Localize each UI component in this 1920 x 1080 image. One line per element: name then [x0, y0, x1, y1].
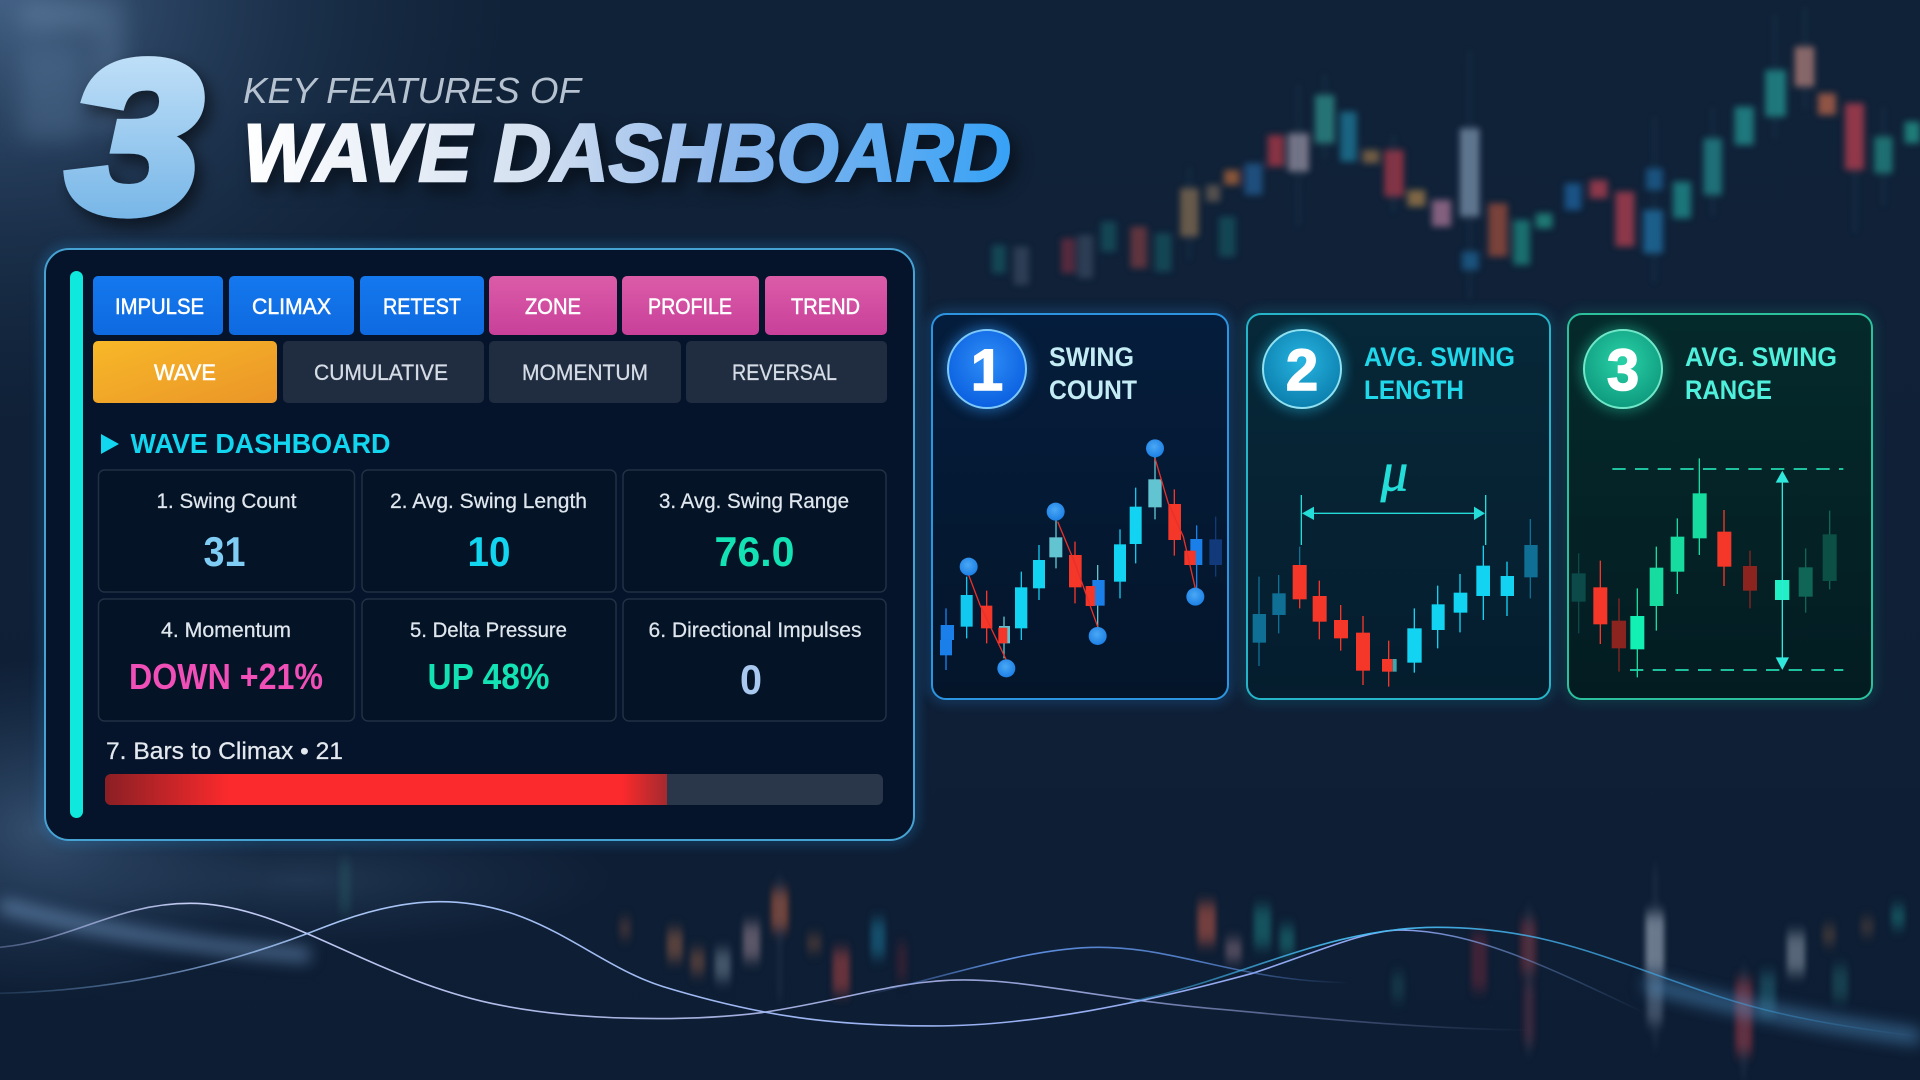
button: cumulative: CUMULATIVE [314, 360, 448, 385]
card 3: avg swing range [1568, 314, 1872, 699]
button: retest [360, 276, 484, 335]
panel: wave dashboard [45, 249, 914, 840]
card 3 heading: RANGE [1685, 375, 1772, 405]
card 3 heading [1685, 342, 1837, 405]
chart: swing range candles [1572, 458, 1843, 677]
button: impulse: IMPULSE [115, 294, 204, 319]
accent bar [70, 271, 83, 818]
background candlesticks: lower [339, 860, 1905, 1080]
card 2 heading: AVG. SWING [1364, 342, 1515, 372]
title: wave dashboard: WAVE DASHBOARD [243, 108, 1011, 199]
button: wave [93, 341, 277, 403]
metric: delta pressure: 5. Delta Pressure [410, 619, 567, 642]
button: zone: ZONE [525, 294, 581, 319]
metric: momentum: 4. Momentum [161, 619, 291, 642]
metric: delta pressure: UP 48% [428, 656, 550, 697]
metric: swing count: 31 [204, 528, 246, 575]
badge 3: 3 [1607, 338, 1639, 403]
button: impulse [93, 276, 223, 335]
card 2: avg swing length [1247, 314, 1550, 699]
card 1 heading [1049, 342, 1137, 405]
metric: avg swing length: 10 [468, 528, 510, 575]
card 2 heading [1364, 342, 1515, 405]
chart: swing candles [940, 439, 1222, 677]
metric: momentum [98, 599, 354, 721]
metric: avg swing length: 2. Avg. Swing Length [390, 490, 587, 513]
section heading: WAVE DASHBOARD [130, 428, 390, 459]
button row one [93, 276, 887, 335]
metric: directional impulses: 0 [740, 656, 762, 703]
button row two [93, 341, 887, 403]
button: reversal [686, 341, 887, 403]
metric: avg swing range: 3. Avg. Swing Range [659, 490, 849, 513]
chart: swing length candles: μ [1380, 442, 1408, 503]
button: momentum [489, 341, 681, 403]
button: climax: CLIMAX [252, 294, 331, 319]
button: reversal: REVERSAL [732, 360, 837, 385]
card 2 heading: LENGTH [1364, 375, 1464, 405]
metric: directional impulses: 6. Directional Impulses [648, 619, 862, 642]
button: retest: RETEST [383, 294, 461, 319]
metric: avg swing range [623, 470, 886, 592]
title: key features of: KEY FEATURES OF [243, 70, 583, 111]
badge 1 [944, 326, 1030, 412]
metric: directional impulses [623, 599, 886, 721]
metric: avg swing length [362, 470, 616, 592]
badge 2 [1259, 326, 1345, 412]
button: trend: TREND [791, 294, 860, 319]
button: wave: WAVE [154, 360, 216, 385]
button: cumulative [283, 341, 484, 403]
badge 1: 1 [971, 338, 1003, 403]
card 1: swing count [932, 314, 1228, 699]
metric: delta pressure [362, 599, 616, 721]
button: profile: PROFILE [648, 294, 732, 319]
bars to climax [105, 738, 883, 805]
bars to climax: 7. Bars to Climax • 21 [106, 738, 343, 765]
card 1 heading: COUNT [1049, 375, 1137, 405]
badge 3 [1580, 326, 1666, 412]
button: momentum: MOMENTUM [522, 360, 648, 385]
waves [0, 902, 1920, 1037]
button: profile [622, 276, 759, 335]
metric: swing count: 1. Swing Count [156, 490, 297, 513]
button: zone [489, 276, 617, 335]
badge 2: 2 [1286, 338, 1318, 403]
card 3 heading: AVG. SWING [1685, 342, 1837, 372]
card 1 heading: SWING [1049, 342, 1134, 372]
title number 3: 3 [68, 18, 201, 257]
metric: swing count [98, 470, 354, 592]
background candlesticks: upper right [992, 7, 1920, 300]
button: climax [229, 276, 354, 335]
metric: avg swing range: 76.0 [714, 528, 794, 575]
chart: swing length candles [1253, 442, 1538, 687]
button: trend [765, 276, 887, 335]
metric: momentum: DOWN +21% [129, 656, 323, 697]
